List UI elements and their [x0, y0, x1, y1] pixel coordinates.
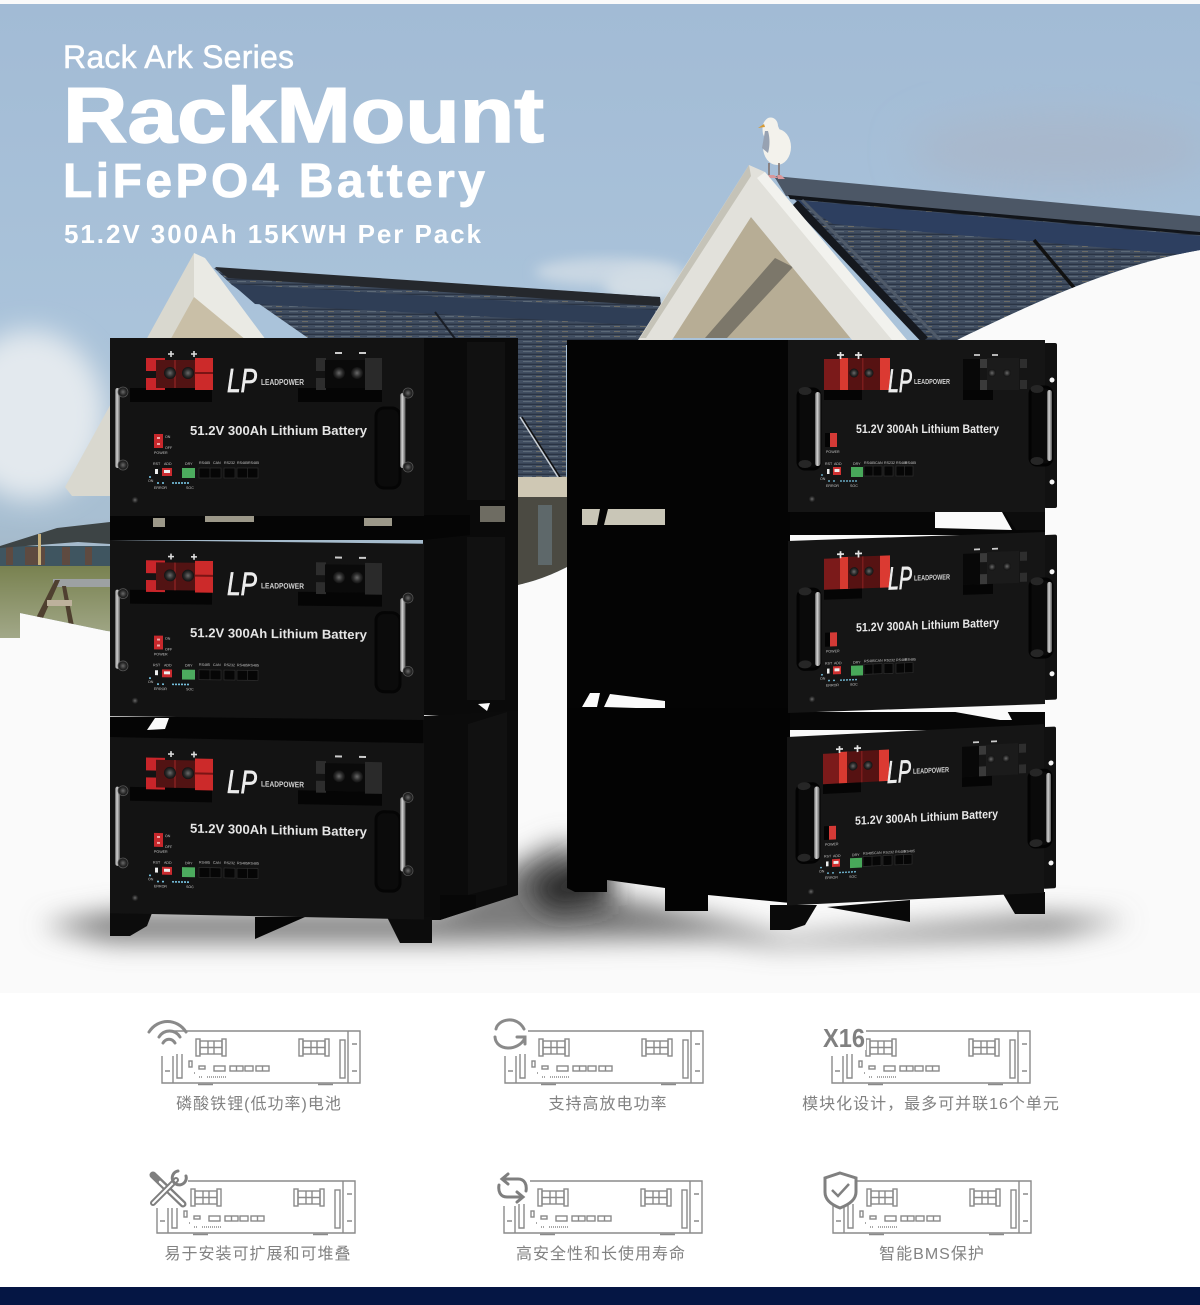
battery unit: left bottom: OFF — [165, 845, 173, 849]
battery unit: left bottom: RST — [153, 861, 161, 865]
battery unit: left bottom: RS485 — [237, 861, 248, 865]
battery unit: left middle: ON — [165, 637, 171, 641]
battery unit: right top: RS485 — [864, 461, 875, 465]
battery unit: right middle: RS232 — [884, 658, 895, 663]
battery unit: right middle: LEADPOWER — [914, 572, 950, 583]
battery unit: left bottom: POWER — [154, 850, 168, 854]
feature: LiFePO4 low power battery — [149, 1022, 360, 1113]
battery unit: right middle: SOC — [850, 683, 858, 687]
battery unit: right top — [788, 340, 1057, 512]
battery unit: left top: ADD — [164, 462, 172, 466]
icon: seagull on roof — [758, 117, 791, 179]
battery unit: left bottom: LEADPOWER — [261, 780, 304, 789]
battery unit: left top: RST — [153, 462, 161, 466]
battery unit: left bottom: DRY — [185, 861, 193, 865]
battery unit: left bottom: RS485 — [248, 862, 259, 866]
battery unit: left bottom: RS485 — [199, 861, 210, 865]
main title: RackMount — [63, 71, 544, 159]
sky — [0, 4, 1200, 644]
caption: 高安全性和长使用寿命 — [516, 1245, 686, 1263]
subtitle: LiFePO4 Battery — [63, 155, 485, 208]
battery stack: left — [110, 338, 518, 943]
caption: 易于安装可扩展和可堆叠 — [164, 1245, 352, 1263]
battery unit: right middle: RS485 — [896, 658, 907, 662]
battery unit: left top: ERROR — [154, 486, 167, 490]
right house gable and solar roof — [638, 165, 1200, 345]
battery unit: right bottom: ON — [819, 869, 825, 874]
battery unit: left bottom — [110, 737, 424, 920]
battery unit: right middle: RST — [825, 661, 833, 666]
battery unit: right middle: 51.2V 300Ah Lithium Battery — [856, 616, 999, 635]
battery unit: left top: CAN — [213, 461, 221, 465]
battery unit: right middle: RS485 — [864, 659, 875, 663]
battery unit: right bottom: POWER — [825, 842, 839, 847]
title block — [63, 39, 544, 249]
battery unit: right middle: LP — [888, 560, 912, 596]
icon: shield check — [825, 1173, 856, 1208]
battery unit: left top — [110, 338, 424, 516]
battery unit: right bottom: DRY — [852, 853, 860, 857]
battery stack: right — [567, 340, 1057, 930]
feature: modular up to 16 units — [802, 1023, 1060, 1113]
battery unit: right middle — [788, 532, 1057, 713]
battery unit: left middle: RS485 — [199, 663, 210, 667]
caption: 智能BMS保护 — [879, 1245, 985, 1263]
battery unit: left bottom: ON — [148, 877, 154, 881]
battery unit: right middle: DRY — [853, 660, 861, 665]
icon: tools — [153, 1171, 186, 1204]
battery unit: left middle: LP — [227, 565, 257, 602]
battery unit: left bottom: CAN — [213, 861, 221, 865]
battery unit: right top: POWER — [826, 450, 840, 454]
battery unit: right top: SOC — [850, 484, 858, 488]
battery unit: left middle: ERROR — [154, 687, 167, 691]
battery unit: left top: RS485 — [248, 461, 259, 465]
battery unit: right top: DRY — [853, 462, 861, 466]
battery unit: left top: RS232 — [224, 461, 235, 465]
battery unit: right top: ADD — [834, 462, 842, 466]
battery unit: left middle: OFF — [165, 648, 173, 652]
feature: high safety and long life — [494, 1172, 702, 1263]
battery unit: right top: RST — [825, 462, 833, 466]
icon: refresh arrow — [495, 1020, 525, 1048]
battery unit: left bottom: ON — [165, 834, 171, 838]
photo backdrop: sky and houses — [0, 4, 1200, 644]
battery unit: right bottom — [787, 724, 1056, 906]
battery unit: right top: LEADPOWER — [914, 377, 950, 386]
battery unit: right top: CAN — [875, 461, 883, 465]
left house gable — [65, 253, 668, 587]
battery unit: left middle: 51.2V 300Ah Lithium Battery — [190, 625, 368, 642]
battery unit: right top: ON — [820, 477, 826, 481]
battery unit: left top: OFF — [165, 446, 173, 450]
battery unit: right middle: RS485 — [905, 658, 916, 662]
side and feet: right stack — [567, 340, 1045, 930]
icon: loop arrows — [499, 1174, 526, 1202]
battery unit: right bottom: LEADPOWER — [913, 765, 949, 776]
battery unit: left top: RS485 — [199, 461, 210, 465]
battery unit: right bottom: 51.2V 300Ah Lithium Battery — [855, 807, 998, 828]
feature: smart BMS protection — [825, 1173, 1031, 1263]
battery unit: left middle: RS485 — [237, 663, 248, 667]
battery unit: right top: RS232 — [884, 461, 895, 465]
battery unit: right top: ERROR — [826, 484, 839, 488]
battery unit: left top: SOC — [186, 486, 194, 490]
battery unit: left top: LP — [227, 362, 257, 399]
feature: high discharge power — [495, 1020, 703, 1113]
battery unit: left top: LEADPOWER — [261, 378, 304, 387]
battery unit: right bottom: LP — [887, 753, 911, 790]
battery unit: right top: 51.2V 300Ah Lithium Battery — [856, 422, 999, 436]
battery unit: right bottom: ERROR — [825, 876, 838, 880]
battery unit: left top: DRY — [185, 462, 193, 466]
battery unit: right middle: POWER — [826, 649, 840, 654]
battery unit: left bottom: SOC — [186, 885, 194, 889]
icon: wifi — [149, 1022, 186, 1043]
icon: X16: X16 — [823, 1023, 865, 1053]
battery unit: left bottom: ADD — [164, 861, 172, 865]
battery unit: right bottom: RST — [824, 854, 832, 859]
caption: 模块化设计，最多可并联16个单元 — [802, 1095, 1060, 1113]
battery unit: left bottom: 51.2V 300Ah Lithium Battery — [190, 821, 368, 839]
battery unit: right middle: CAN — [875, 659, 883, 663]
battery unit: left top: ON — [148, 479, 154, 483]
battery unit: left middle: LEADPOWER — [261, 581, 304, 591]
battery unit: left middle: RS232 — [224, 663, 235, 667]
series label: Rack Ark Series — [63, 39, 294, 75]
battery unit: left top: ON — [165, 435, 171, 439]
battery unit: right bottom: ADD — [833, 854, 841, 858]
lower white section — [0, 993, 1200, 1287]
floor shadows — [40, 835, 1130, 946]
battery unit: left middle — [110, 540, 424, 720]
battery unit: right middle: ON — [820, 677, 826, 681]
distant house and grass — [0, 522, 110, 640]
battery unit: right top: RS485 — [896, 461, 907, 465]
battery unit: right middle: ERROR — [826, 683, 839, 688]
battery unit: left top: 51.2V 300Ah Lithium Battery — [190, 423, 368, 438]
feature: easy install and stack — [146, 1168, 355, 1263]
battery unit: right bottom: CAN — [874, 851, 882, 855]
footer band — [0, 1287, 1200, 1305]
battery unit: left middle: POWER — [154, 652, 168, 657]
battery unit: right top: LP — [888, 363, 912, 399]
battery unit: right bottom: RS485 — [895, 850, 906, 854]
battery unit: left middle: ON — [148, 680, 154, 684]
battery unit: left bottom: RS232 — [224, 861, 235, 865]
spec line: 51.2V 300Ah 15KWH Per Pack — [64, 219, 482, 249]
battery unit: right top: RS485 — [905, 461, 916, 465]
battery unit: right bottom: RS485 — [904, 849, 915, 854]
battery unit: left middle: RS485 — [248, 663, 259, 668]
battery unit: left middle: DRY — [185, 664, 193, 668]
caption: 磷酸铁锂(低功率)电池 — [176, 1095, 342, 1113]
caption: 支持高放电功率 — [548, 1095, 668, 1113]
battery unit: left middle: SOC — [186, 687, 194, 691]
battery unit: left middle: ADD — [164, 663, 172, 667]
battery unit: left top: POWER — [154, 451, 168, 455]
battery unit: left middle: CAN — [213, 663, 221, 667]
battery unit: left middle: RST — [153, 663, 161, 667]
battery unit: left bottom: LP — [227, 763, 257, 800]
battery unit: right bottom: RS232 — [883, 850, 894, 855]
battery unit: right bottom: RS485 — [863, 851, 874, 856]
battery unit: right middle: ADD — [834, 661, 842, 665]
side and feet: left stack — [110, 338, 518, 943]
battery unit: left top: RS485 — [237, 461, 248, 465]
battery unit: left bottom: ERROR — [154, 884, 167, 889]
page background — [0, 0, 1200, 993]
battery unit: right bottom: SOC — [849, 875, 857, 879]
